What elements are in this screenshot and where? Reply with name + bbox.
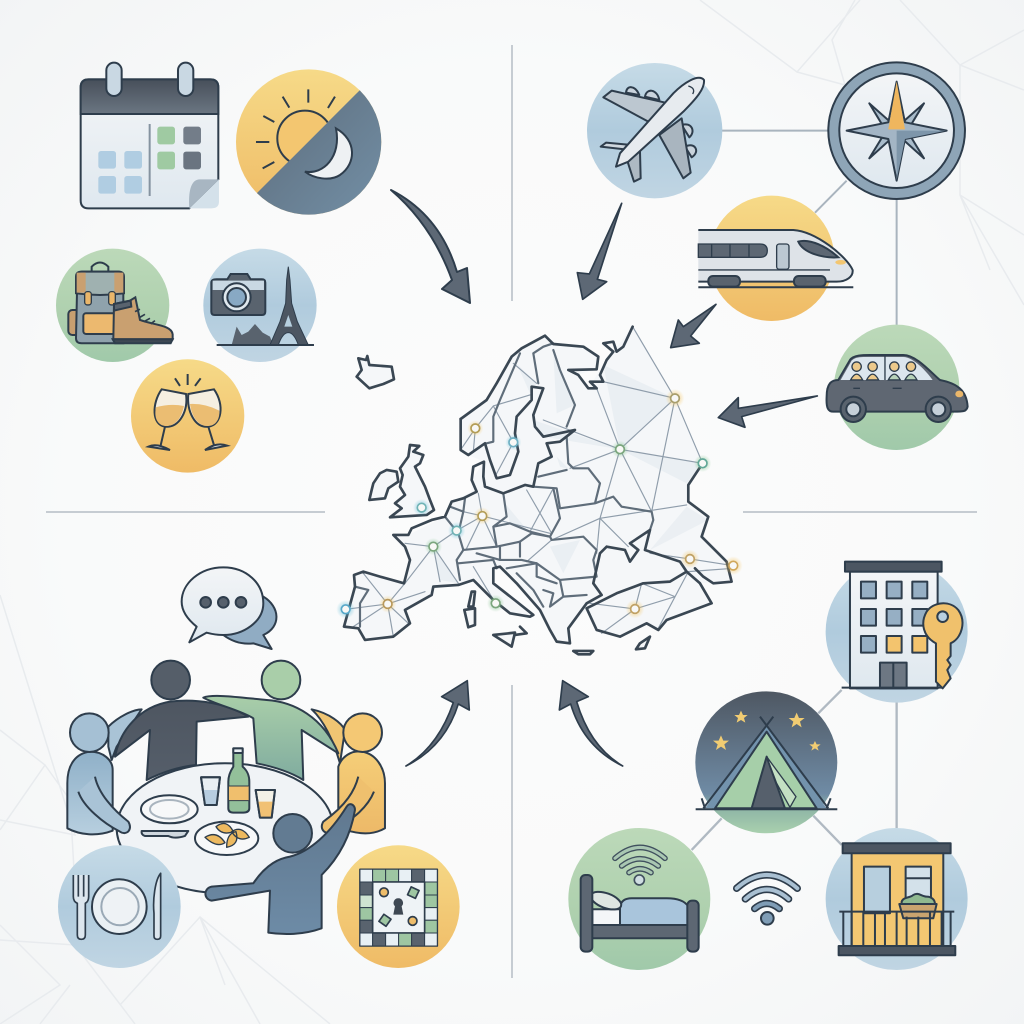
icon: board game bbox=[337, 845, 460, 968]
map nodes bbox=[336, 389, 743, 619]
map land fill bbox=[344, 327, 732, 643]
arrow: accommodation to map bbox=[559, 681, 623, 766]
map: Iceland bbox=[357, 356, 394, 388]
icon: toasting wine glasses bbox=[131, 359, 244, 473]
icon: backpack and boot bbox=[56, 249, 173, 362]
map: Ireland bbox=[369, 470, 398, 500]
map: Great Britain bbox=[390, 445, 434, 517]
icon: car with passengers bbox=[827, 325, 968, 450]
panel: sharing with people bbox=[58, 567, 469, 968]
table items bbox=[141, 795, 198, 823]
map shaded facets bbox=[365, 353, 708, 583]
panel: transport network bbox=[577, 62, 968, 450]
map: Sicily bbox=[493, 633, 515, 647]
front person bbox=[205, 804, 355, 934]
icon: hotel and key bbox=[826, 561, 968, 703]
map network lines bbox=[346, 327, 733, 637]
connector lines bbox=[722, 131, 897, 325]
arrow: season to map bbox=[391, 190, 470, 303]
icon: speech bubbles bbox=[182, 567, 276, 649]
connector lines bbox=[692, 690, 897, 850]
table bbox=[117, 763, 333, 893]
panel: accommodation bbox=[559, 561, 968, 970]
icon: bed with wifi bbox=[568, 828, 710, 970]
map: Crete bbox=[573, 651, 593, 654]
map coastlines and borders bbox=[355, 343, 653, 627]
icon: tent under stars bbox=[695, 691, 837, 833]
icon: camera and Eiffel Tower bbox=[203, 249, 317, 362]
arrow: train to map bbox=[671, 304, 716, 348]
icon: plate and cutlery bbox=[58, 845, 181, 968]
map: mainland coast bbox=[344, 327, 732, 643]
map: Sardinia and Corsica bbox=[464, 592, 475, 627]
icon: compass bbox=[828, 62, 965, 199]
arrow: people to map bbox=[406, 681, 469, 766]
panel: when to go (calendar, day/night, gear, sights, drinks) bbox=[56, 47, 387, 473]
europe map bbox=[336, 327, 743, 654]
icon: calendar bbox=[81, 63, 219, 208]
map: Cyprus bbox=[636, 637, 650, 649]
icon: train bbox=[698, 196, 853, 321]
arrow: car to map bbox=[718, 396, 817, 427]
icon: wifi symbol bbox=[737, 875, 797, 925]
icon: plane bbox=[587, 63, 722, 198]
icon: sun and moon bbox=[236, 69, 382, 215]
figure: people around a table bbox=[67, 661, 385, 934]
icon: apartment with balcony bbox=[826, 828, 968, 970]
arrow: plane to map bbox=[577, 203, 622, 299]
